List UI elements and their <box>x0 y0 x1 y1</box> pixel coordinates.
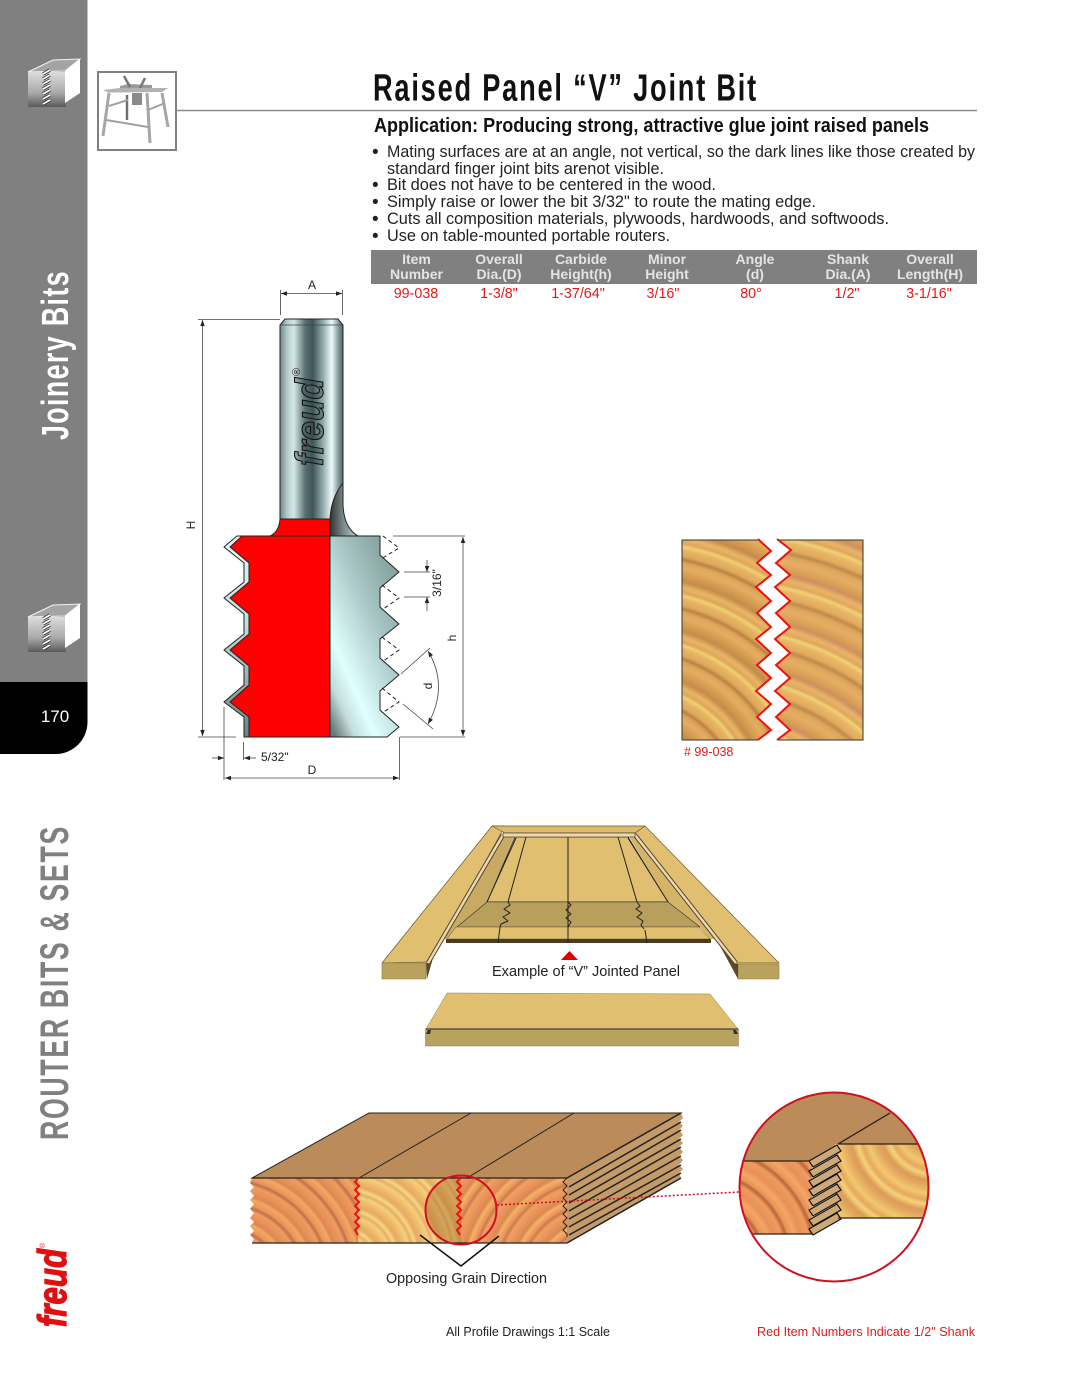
bit fillet red and steel <box>270 483 358 536</box>
red cutter body <box>230 536 330 737</box>
router bit diagram <box>184 278 465 780</box>
table header labels: Overall <box>475 251 523 267</box>
table values: 1/2" <box>835 286 859 302</box>
dimension 3/16 <box>404 560 444 611</box>
title rule <box>176 110 977 112</box>
lower dark edge <box>446 939 711 943</box>
steel cutter body <box>330 536 399 737</box>
stacked grain block <box>250 1113 739 1245</box>
dimension angle d <box>401 648 438 729</box>
bullet list: Bit does not have to be centered in the wood. <box>387 176 716 194</box>
grain caption: Opposing Grain Direction <box>386 1271 547 1287</box>
sidebar: gray section tab <box>0 0 88 690</box>
sample caption: # 99-038 <box>684 745 733 759</box>
bullet list: Mating surfaces are at an angle, not vertical, so the dark lines like those created by <box>387 143 976 161</box>
left board <box>682 540 771 740</box>
table header labels: Carbide <box>555 251 607 267</box>
dimension 5/32: 5/32" <box>261 750 289 764</box>
left stile <box>382 826 505 979</box>
block board lines <box>359 1113 574 1178</box>
loose raised panel board <box>426 993 738 1046</box>
sidebar label: ROUTER BITS & SETS: ROUTER BITS & SETS <box>33 825 77 1140</box>
right stile <box>635 826 779 979</box>
table header labels: Item <box>402 251 431 267</box>
table header labels <box>390 251 963 282</box>
bit shank: freud <box>289 377 332 466</box>
dimension H: H <box>184 521 198 529</box>
dimension h: h <box>445 635 459 641</box>
footer note: red numbers: Red Item Numbers Indicate 1/2" Shank <box>757 1325 976 1339</box>
bullet list: Use on table-mounted portable routers. <box>387 227 670 245</box>
table values: 3/16" <box>647 286 679 302</box>
dimension A: A <box>308 278 316 292</box>
bullet list: • <box>372 226 379 247</box>
bullet list: • <box>372 209 379 230</box>
bullet list: • <box>372 175 379 196</box>
table values: 3-1/16" <box>906 286 952 302</box>
table header labels: (d) <box>746 266 764 282</box>
left board grain <box>250 1178 358 1243</box>
logo: freud red: freud <box>31 1248 75 1327</box>
joint lines <box>487 837 668 943</box>
logo: freud red: ® <box>39 1242 47 1248</box>
right bevel <box>628 835 716 939</box>
red pointer triangle <box>561 951 578 960</box>
table values: 1-37/64" <box>551 286 605 302</box>
page number tab <box>0 682 88 754</box>
table header labels: Number <box>390 266 443 282</box>
top rail <box>492 826 645 833</box>
block top face <box>252 1113 681 1178</box>
specification table <box>371 250 977 302</box>
detail circle <box>426 1176 496 1244</box>
dimension angle d: d <box>421 683 435 689</box>
icon: finger joint block lower <box>28 604 80 652</box>
table header labels: Overall <box>906 251 954 267</box>
icon: finger joint block top <box>28 59 80 107</box>
table values <box>394 286 952 302</box>
bit shank: ® <box>291 368 303 376</box>
table header labels: Length(H) <box>897 266 963 282</box>
magnified joint callout <box>735 1090 935 1282</box>
subtitle: Application: Producing strong, attractive glue joint raised panels <box>374 114 929 137</box>
middle board grain <box>358 1178 460 1243</box>
grain direction pointer <box>420 1235 499 1266</box>
left bead <box>428 835 503 963</box>
right bead <box>635 835 736 963</box>
right board grain <box>460 1178 567 1243</box>
bullet list: standard finger joint bits arenot visible. <box>387 160 664 178</box>
icon: router table <box>98 72 176 150</box>
mating profile dashed <box>381 536 399 713</box>
table header labels: Dia.(D) <box>476 266 522 282</box>
dimension A <box>280 278 342 315</box>
front bevel <box>457 902 700 927</box>
dimension H <box>184 320 280 737</box>
magnified top face <box>744 1094 917 1160</box>
dimension 3/16: 3/16" <box>430 569 444 597</box>
dimension h <box>393 536 465 737</box>
table header labels: Height <box>645 266 689 282</box>
magnified left board <box>735 1161 812 1234</box>
center field <box>487 837 668 902</box>
bullet list <box>372 142 976 247</box>
dotted leader <box>497 1192 739 1205</box>
carbide edge strip <box>224 536 252 737</box>
magnified right board <box>835 1144 935 1218</box>
wood joint sample <box>682 539 863 740</box>
V joint zigzags <box>500 902 644 929</box>
footer note: scale: All Profile Drawings 1:1 Scale <box>446 1325 610 1339</box>
table header labels: Minor <box>648 251 687 267</box>
red joint lines <box>756 539 791 740</box>
table header labels: Height(h) <box>550 266 612 282</box>
bullet list: Cuts all composition materials, plywoods, hardwoods, and softwoods. <box>387 210 889 228</box>
bullet list: • <box>372 142 379 163</box>
bullet list: Simply raise or lower the bit 3/32" to route the mating edge. <box>387 193 816 211</box>
front lip <box>447 927 710 939</box>
raised panel door illustration <box>382 826 779 979</box>
dimension 5/32 <box>212 707 289 780</box>
top bead <box>503 833 635 837</box>
page number tab: 170 <box>41 707 69 726</box>
left bevel <box>442 835 515 939</box>
table values: 80° <box>740 286 762 302</box>
bit shank <box>280 319 343 520</box>
title: Raised Panel “V” Joint Bit <box>373 68 758 110</box>
table header labels: Dia.(A) <box>825 266 871 282</box>
right board <box>775 540 863 740</box>
magnified joint fins <box>809 1145 841 1235</box>
bullet list: • <box>372 192 379 213</box>
dimension D: D <box>308 763 317 777</box>
table header labels: Shank <box>827 251 869 267</box>
sidebar label: Joinery Bits: Joinery Bits <box>35 270 77 440</box>
red joint lines <box>355 1178 461 1235</box>
panel caption: Example of “V” Jointed Panel <box>492 964 680 980</box>
block side fins <box>567 1113 683 1243</box>
table values: 1-3/8" <box>480 286 518 302</box>
table header labels: Angle <box>736 251 775 267</box>
table values: 99-038 <box>394 286 438 302</box>
